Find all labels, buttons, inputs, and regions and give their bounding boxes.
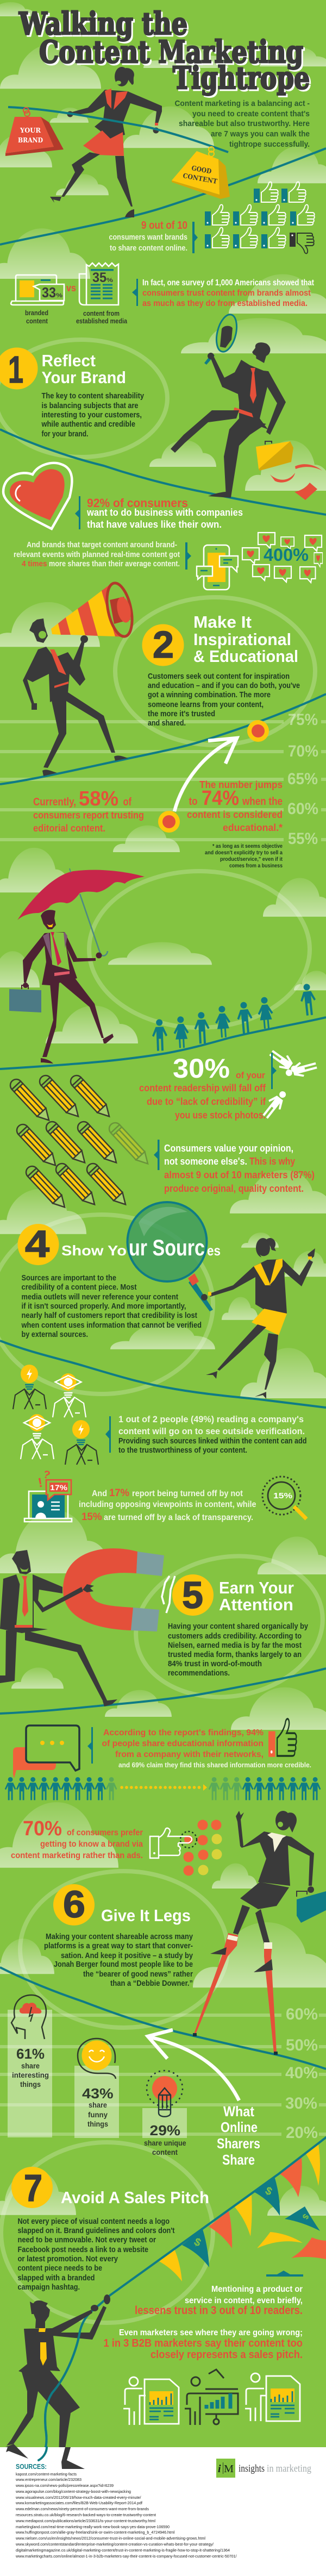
percentage scale: sharers: 40% <box>285 2064 318 2082</box>
sources list: www.visualnews.com/2012/06/19/how-much-data-created-every-minute/ <box>15 2495 141 2500</box>
callout: 1 in 3 B2B marketers: Even marketers see where they are going wrong; <box>119 2328 303 2337</box>
percentage scale: sharers: 50% <box>286 2036 318 2054</box>
stat: 30% fall off: due to “lack of credibility” if <box>147 1096 266 1107</box>
bunting flags on the rope: $ <box>264 2185 274 2198</box>
icon: 400% heart messages <box>242 533 323 583</box>
number badge 6: 6 <box>63 1883 85 1925</box>
stat: jumps to 74%: educational.* <box>223 822 283 833</box>
body: avoid a sales pitch: campaign hashtag. <box>17 2283 80 2292</box>
sources list: www.agorapulse.com/blog/content-strategy-boost-with-newsjacking <box>15 2489 131 2494</box>
stat: 70% of consumers: 70% <box>23 1817 62 1840</box>
callout: 4 times more shares: 4 times <box>22 560 47 568</box>
bar 61% interesting things: share <box>21 2061 40 2070</box>
callout: original content: produce original, quality content. <box>164 1183 304 1194</box>
heading: avoid a sales pitch: Avoid A Sales Pitch <box>61 2188 209 2207</box>
icon: phone with chat bubbles <box>197 545 238 590</box>
icon: newspaper with established media: content from <box>83 309 120 317</box>
sources list: www.ipsos-na.com/news-polls/pressrelease.aspx?id=6239 <box>15 2483 114 2488</box>
heading: show your sources: Show Yo <box>61 1242 127 1259</box>
body: reflect your brand: is balancing subjects that are <box>41 401 138 410</box>
body: avoid a sales pitch <box>17 2217 175 2292</box>
percentage scale: trust: 55% <box>288 830 318 848</box>
bar 29% unique content: content <box>152 2148 178 2156</box>
sources list: marketingland.com/real-time-marketing-really-work-new-book-says-yes-data-prove-106590 <box>16 2524 170 2529</box>
body: show your sources: media outlets will never reference your content <box>22 1292 178 1302</box>
callout: 4 times more shares: more shares than their average content. <box>49 560 180 568</box>
body: show your sources: if it isn't sourced properly. And more importantly, <box>22 1302 186 1311</box>
icon: heart <box>3 463 72 529</box>
stat: 70% of consumers: of consumers prefer <box>67 1828 143 1837</box>
logo: insights in marketing: in marketing <box>267 2463 311 2474</box>
heading: what online sharers share: What <box>223 2103 254 2119</box>
number badge 4 <box>17 1223 59 1265</box>
percentage scale: trust: 70% <box>288 742 318 760</box>
body: give it legs: platforms is a great way to start that conver- <box>44 1941 193 1950</box>
stat: 17% and 15% turned off: And <box>92 1489 107 1498</box>
bar 61% interesting things: things <box>20 2080 41 2089</box>
footnote: product/service," even if it <box>220 856 283 862</box>
icon: 400% heart messages: 400% <box>264 545 309 565</box>
number badge 1 <box>0 348 38 391</box>
icon: laptop with 17% bubble: ! <box>37 1475 43 1491</box>
weight: good content <box>172 147 230 199</box>
footnote <box>205 843 283 869</box>
body: avoid a sales pitch: content piece needs to be <box>17 2264 102 2273</box>
stat: currently 58%: consumers report trusting <box>33 810 144 821</box>
stat: 92% of consumers: want to do business with companies <box>86 507 243 518</box>
body: show your sources: by external sources. <box>22 1330 88 1339</box>
stat: 17% and 15% turned off: including opposing viewpoints in content, while <box>79 1500 256 1509</box>
stat: jumps to 74% <box>187 779 283 833</box>
heading: earn your attention: Attention <box>219 1595 293 1614</box>
stat: 9 out of 10 consumers: consumers want brands <box>109 233 187 242</box>
body: avoid a sales pitch: slapped on it. Brand guidelines and colors don't <box>17 2226 175 2235</box>
figure: woman with magnifying glass <box>201 1238 315 1399</box>
mirror fragments <box>270 464 322 500</box>
stat: 30% fall off: you use stock photos. <box>175 1110 266 1121</box>
heading: reflect your brand: Your Brand <box>41 368 126 387</box>
body: give it legs <box>44 1932 193 1988</box>
body: make it inspirational: the more it's trusted <box>148 709 215 718</box>
icon: laptop with 17% bubble <box>24 1468 72 1522</box>
callout: 1 in 3 B2B marketers <box>103 2328 303 2361</box>
body: show your sources: Sources are important to the <box>22 1273 116 1283</box>
callout: trust survey <box>132 278 314 308</box>
heading: what online sharers share <box>217 2103 260 2168</box>
stat: 9 out of 10 consumers: to share content online. <box>110 243 187 253</box>
bunting flags on the rope: $ <box>300 2212 311 2221</box>
body: reflect your brand: The key to content shareability <box>41 391 145 401</box>
percentage scale: trust: 60% <box>287 800 318 818</box>
icon: laptop with 17% bubble: 17% <box>50 1483 68 1492</box>
heading: earn your attention <box>219 1578 294 1614</box>
intro text: you need to create content that's <box>192 109 310 118</box>
icon: magnifier 15%: 15% <box>273 1491 292 1500</box>
brush rings behind the section headings <box>0 340 326 2323</box>
stat: currently 58%: editorial content. <box>33 823 105 834</box>
stat: 94% share, 69% credible: of people share educational information <box>102 1739 264 1748</box>
icon: newspaper with established media <box>76 263 128 325</box>
heading: what online sharers share: Share <box>222 2152 255 2168</box>
stat: 17% and 15% turned off: 17% <box>109 1487 129 1499</box>
logo: insights in marketing: M <box>224 2463 234 2475</box>
icon: red cuff thumb <box>268 1719 297 1757</box>
figure: man with mirror and briefcase <box>171 312 293 498</box>
body: avoid a sales pitch: need to be unmovable. Not every tweet or <box>17 2235 156 2244</box>
heading: make it inspirational and educational: & Educational <box>193 647 298 666</box>
icon: rope on top of the man <box>39 2331 80 2460</box>
icon: magnet <box>63 1548 175 1631</box>
icon: magnifier 15% <box>262 1477 306 1519</box>
icon: hand pressing dots <box>150 1820 222 1876</box>
figure: man with umbrella and briefcase <box>9 868 145 1064</box>
callout: 1 in 3 B2B marketers: closely represents a sales pitch. <box>151 2349 303 2361</box>
callout: original content: Consumers value your opinion, <box>164 1143 293 1154</box>
number badge 7: 7 <box>24 2167 42 2209</box>
stat: 94% share, 69% credible: from a company with their networks, <box>115 1750 264 1759</box>
stat: 94% share, 69% credible <box>87 1727 311 1769</box>
icon: laptop with branded content: % <box>56 292 62 299</box>
bunting flags on the rope: $ <box>192 2236 203 2249</box>
bar 43% funny things: 43% <box>82 2085 114 2102</box>
body: make it inspirational: and education – and if you can do both, you've <box>148 681 300 690</box>
people on the rope <box>152 983 317 1051</box>
body: reflect your brand: interesting to your customers, <box>41 410 142 420</box>
number badge 6 <box>53 1883 95 1925</box>
percentage scale: sharers: 30% <box>285 2094 317 2112</box>
heading: show your sources: es <box>207 1242 221 1259</box>
body: make it inspirational: got a winning combination. The more <box>148 690 271 699</box>
stat: currently 58%: 58% <box>79 787 118 810</box>
heading: show your sources: ur Sourc <box>129 1235 205 1260</box>
percentage scale: sharers: 20% <box>286 2124 318 2142</box>
stat: 17% and 15% turned off: report being turned off by not <box>132 1489 243 1498</box>
icon: speech bubbles <box>13 1725 79 1778</box>
body: make it inspirational: someone learns from your content, <box>148 700 264 709</box>
figure: woman balancing on the tightrope <box>50 67 162 217</box>
stat: currently 58% <box>33 787 144 834</box>
stat: 70% of consumers: getting to know a brand via <box>40 1840 143 1849</box>
body: make it inspirational <box>148 672 300 728</box>
bar 61% interesting things: 61% <box>16 2046 45 2062</box>
stat: 30% fall off: of your <box>236 1070 265 1080</box>
callout: 4 times more shares: And brands that target content around brand- <box>27 541 177 549</box>
callout: 1 out of 2 people: 1 out of 2 people (49%) reading a company's <box>118 1414 304 1424</box>
percentage scale: sharers <box>0 2005 326 2142</box>
number badge 4: 4 <box>25 1223 49 1265</box>
stat: 70% of consumers <box>11 1817 143 1860</box>
sources list: www.marketingcharts.com/online/almost-1-in-3-b2b-marketers-say-their-content-is-company-focused-not-customer-centric-50701/ <box>15 2554 237 2559</box>
stat: 30% fall off: content readership will fall off <box>139 1083 266 1093</box>
figure: man with megaphone <box>23 618 128 776</box>
weight: good content: CONTENT <box>182 172 218 185</box>
body: earn your attention: 84% trust in word-of-mouth <box>168 1659 262 1668</box>
stat: jumps to 74%: content is considered <box>187 809 283 820</box>
rope end over footer <box>39 2447 47 2460</box>
footnote: * as long as it seems objective <box>212 843 283 849</box>
icon: newspaper with established media: % <box>106 277 113 284</box>
icon: presenter with report, right <box>245 2373 300 2421</box>
stat: 9 out of 10 consumers <box>109 220 198 253</box>
figure: man pulling the bunting rope <box>5 2294 110 2469</box>
bar 43% funny things: things <box>87 2119 108 2128</box>
body: reflect your brand: while authentic and credible <box>41 420 135 429</box>
callout: 1 out of 2 people: to the trustworthiness of your content. <box>118 1446 247 1455</box>
sources list <box>15 2462 237 2559</box>
heading: what online sharers share: Online <box>221 2119 258 2135</box>
stat: jumps to 74%: when the <box>242 796 283 808</box>
number badge 2: 2 <box>153 623 174 666</box>
heading: make it inspirational and educational: Make It <box>193 612 252 632</box>
arrow to what online sharers share <box>148 2030 239 2100</box>
stat: jumps to 74%: The number jumps <box>199 779 283 790</box>
footer panel <box>0 2447 326 2576</box>
icon: people falling <box>259 1047 318 1122</box>
figure legs over footer <box>6 2444 85 2469</box>
bar 29% unique content: share unique <box>144 2139 186 2147</box>
callout: original content: not someone else's. <box>164 1156 247 1167</box>
icon: presenter with chart, centre <box>185 2369 238 2425</box>
dotted arrow <box>122 1784 207 1791</box>
stat: 17% and 15% turned off: 15% <box>82 1511 102 1523</box>
callout: lessens trust: Mentioning a product or <box>211 2285 303 2294</box>
bar 61% interesting things <box>11 1995 49 2089</box>
thumbs: 9 out of 10 <box>205 182 315 253</box>
sources list: www.entrepreneur.com/article/232083 <box>15 2477 82 2482</box>
stat: currently 58%: of <box>123 796 131 808</box>
percentage scale: trust: 65% <box>287 770 318 788</box>
weight: good content: GOOD <box>191 164 212 175</box>
bar 43% funny things <box>78 2039 116 2128</box>
body: show your sources <box>21 1273 202 1339</box>
heading: earn your attention: Earn Your <box>219 1578 294 1597</box>
icon: newspaper with established media: 35 <box>92 270 106 285</box>
number badge 5 <box>172 1574 214 1616</box>
heading: reflect your brand: Reflect <box>41 351 96 370</box>
percentage scale: trust: 75% <box>288 711 318 729</box>
callout: original content: almost 9 out of 10 marketers (87%) <box>164 1170 315 1180</box>
icon: presenter with report, left <box>123 2377 179 2425</box>
icon: pencils <box>8 1073 152 1211</box>
callout: original content <box>154 1140 315 1194</box>
callout: 4 times more shares <box>14 541 191 570</box>
stat: 92% of consumers <box>75 496 243 530</box>
sources list: kapost.com/content-marketing-facts <box>16 2472 77 2477</box>
footnote: comes from a business <box>229 862 283 869</box>
magnifying glass <box>127 1202 213 1311</box>
body: make it inspirational: Customers seek out content for inspiration <box>148 672 290 681</box>
number badge 2 <box>142 623 184 666</box>
icon: laptop with branded content: branded <box>25 309 48 317</box>
body: give it legs: Jonah Berger found most people like to be <box>54 1960 193 1969</box>
stat: 9 out of 10 consumers: 9 out of 10 <box>141 220 187 232</box>
tightropes <box>0 148 326 2069</box>
heading: what online sharers share: Sharers <box>217 2135 260 2152</box>
sources list: www.nielsen.com/us/en/insights/news/2012/consumer-trust-in-online-social-and-mobile-advertising-grows.html <box>15 2536 205 2541</box>
icon: laptop with 17% bubble: ? <box>42 1468 52 1481</box>
footnote: and doesn't explicitly try to sell a <box>205 849 283 856</box>
stat: jumps to 74%: to <box>189 796 198 808</box>
callout: 1 out of 2 people <box>105 1414 306 1455</box>
percentage scale: trust <box>0 711 326 848</box>
body: avoid a sales pitch: Not every piece of visual content needs a logo <box>17 2217 170 2226</box>
heading: give it legs: Give It Legs <box>101 1906 191 1925</box>
body: earn your attention <box>168 1622 309 1678</box>
callout: lessens trust: lessens trust in 3 out of 10 readers. <box>135 2304 303 2317</box>
body: avoid a sales pitch: or latest promotion. Not every <box>17 2254 118 2264</box>
stat: 17% and 15% turned off: are turned off by a lack of transparency. <box>104 1513 253 1522</box>
body: earn your attention: customers adds credibility. According to <box>168 1631 302 1641</box>
body: reflect your brand <box>41 391 145 439</box>
vs: vs <box>66 283 76 293</box>
stat: 92% of consumers: that have values like their own. <box>87 519 222 530</box>
bar 43% funny things: share <box>89 2100 107 2109</box>
icon: megaphone <box>51 581 136 639</box>
body: show your sources: nearly half of customers report that credibility is lost <box>22 1311 197 1320</box>
icon: newspaper with established media: established media <box>76 317 128 325</box>
body: earn your attention: trusted media form, thanks largely to an <box>168 1650 302 1659</box>
sources list: www.skyword.com/contentstandard/enterprise-marketing/content-creation-vs-curation-whats-best-for-your-strategy/ <box>15 2542 214 2547</box>
bar 29% unique content: 29% <box>150 2122 180 2139</box>
body: give it legs: the “bearer of good news” rather <box>83 1969 193 1979</box>
stat: jumps to 74%: 74% <box>202 787 239 810</box>
bar 61% interesting things: interesting <box>12 2071 49 2079</box>
chart bars: what online sharers share <box>8 2010 187 2138</box>
callout: 1 out of 2 people: content will go on to see outside verification. <box>118 1426 305 1436</box>
chart markers and arrow: 58% to 74% <box>158 720 269 833</box>
heading: make it inspirational and educational: Inspirational <box>193 630 291 649</box>
intro text <box>175 99 310 149</box>
callout: trust survey: as much as they do from established media. <box>142 299 308 308</box>
intro text: Content marketing is a balancing act - <box>175 99 310 108</box>
bunting flags on the rope <box>159 2144 326 2281</box>
heading: show your sources <box>61 1235 221 1260</box>
bar 29% unique content <box>144 2071 186 2156</box>
heading: make it inspirational and educational <box>193 612 298 666</box>
sources list: resources.stratu.co.uk/blog/6-research-backed-ways-to-create-trustworthy-content <box>16 2512 156 2517</box>
body: reflect your brand: for your brand. <box>41 429 88 439</box>
icon: laptop with branded content <box>11 275 64 325</box>
callout: original content: This is why <box>249 1156 295 1167</box>
stat: 17% and 15% turned off <box>79 1487 256 1523</box>
heading: reflect your brand <box>41 351 126 387</box>
icon: laptop with branded content: 33 <box>42 284 56 301</box>
body: give it legs: sation. And keep it positive – a study by <box>61 1951 193 1960</box>
percentage scale: sharers: 60% <box>286 2005 318 2023</box>
stat: 30% fall off: 30% <box>173 1053 230 1084</box>
title <box>18 6 310 96</box>
weight: your brand <box>5 108 64 156</box>
callout: trust survey: consumers trust content from brands almost <box>142 289 311 298</box>
logo: insights in marketing <box>216 2459 311 2478</box>
body: earn your attention: recommendations. <box>168 1668 230 1678</box>
number badge 1: 1 <box>8 348 23 391</box>
weight: your brand: BRAND <box>18 136 43 144</box>
sources list: SOURCES: <box>16 2462 47 2471</box>
sources list: www.mediapost.com/publications/article/233631/is-your-content-trustworthy.html <box>15 2518 155 2523</box>
icon: laptop with branded content: content <box>26 317 48 325</box>
stat: 94% share, 69% credible: and 69% claim they find this shared information more credible. <box>118 1761 311 1769</box>
body: show your sources: credibility of a content piece. Most <box>22 1283 137 1292</box>
callout: lessens trust: service in content, even briefly, <box>185 2296 303 2305</box>
body: make it inspirational: and shared. <box>148 718 186 728</box>
title: Walking the <box>18 6 187 42</box>
stat: 94% share, 69% credible: According to the report's findings, 94% <box>103 1728 264 1737</box>
body: avoid a sales pitch: slapped with a branded <box>17 2273 95 2283</box>
body: avoid a sales pitch: Facebook post needs a link to a website <box>17 2245 148 2254</box>
callout: 1 in 3 B2B marketers: 1 in 3 B2B marketers say their content too <box>103 2337 303 2349</box>
bar 43% funny things: funny <box>88 2110 108 2119</box>
body: show your sources: when content uses information that cannot be verified <box>21 1321 202 1330</box>
weight: your brand: YOUR <box>20 127 41 134</box>
intro text: tightrope successfully. <box>229 140 310 149</box>
number badge 5: 5 <box>182 1574 203 1616</box>
bunting rope pulled by the man <box>39 2137 326 2460</box>
callout: lessens trust <box>135 2271 303 2317</box>
stat: 30% fall off <box>139 1053 277 1121</box>
balancing pole <box>8 107 228 152</box>
callout: 4 times more shares: relevant events with planned real-time content got <box>14 551 180 559</box>
intro text: are 7 ways you can walk the <box>211 129 310 139</box>
stat: 70% of consumers: content marketing rather than ads. <box>11 1851 143 1860</box>
sources list: www.edelman.com/news/ninety-percent-of-consumers-want-more-from-brands <box>15 2506 149 2511</box>
sources list: digitalmarketingmagazine.co.uk/digital-marketing-content/trust-in-content-marketing-is-fragile-how-to-stop-it-shattering/1364 <box>16 2548 230 2553</box>
stat: currently 58%: Currently, <box>33 796 76 808</box>
number badge 7 <box>11 2167 53 2209</box>
icon: people row before <box>5 1777 117 1800</box>
body: give it legs: Making your content shareable across many <box>46 1932 193 1941</box>
intro text: shareable but also trustworthy. Here <box>179 119 310 128</box>
figure: woman on stilts with bag <box>193 1811 326 2055</box>
body: earn your attention: Nielsen, earned media is by far the most <box>168 1641 302 1650</box>
body: give it legs: than a “Debbie Downer.” <box>110 1979 193 1988</box>
stat: 92% of consumers: 92% of consumers <box>87 496 188 510</box>
sources list: www.huffingtonpost.com/allie-gray-freeland/sink-or-swim-content-marketing_b_4724946.html <box>15 2530 175 2535</box>
sources list: www.komarketingassociates.com/files/B2B-Web-Usability-Report-2014.pdf <box>15 2500 143 2505</box>
logo: insights in marketing: i <box>218 2463 221 2475</box>
figure: man with magnet <box>0 1550 117 1706</box>
icon: lightbulb and eye people <box>13 1365 98 1465</box>
icon: people row after <box>209 1777 321 1800</box>
logo: insights in marketing: insights <box>239 2463 265 2474</box>
